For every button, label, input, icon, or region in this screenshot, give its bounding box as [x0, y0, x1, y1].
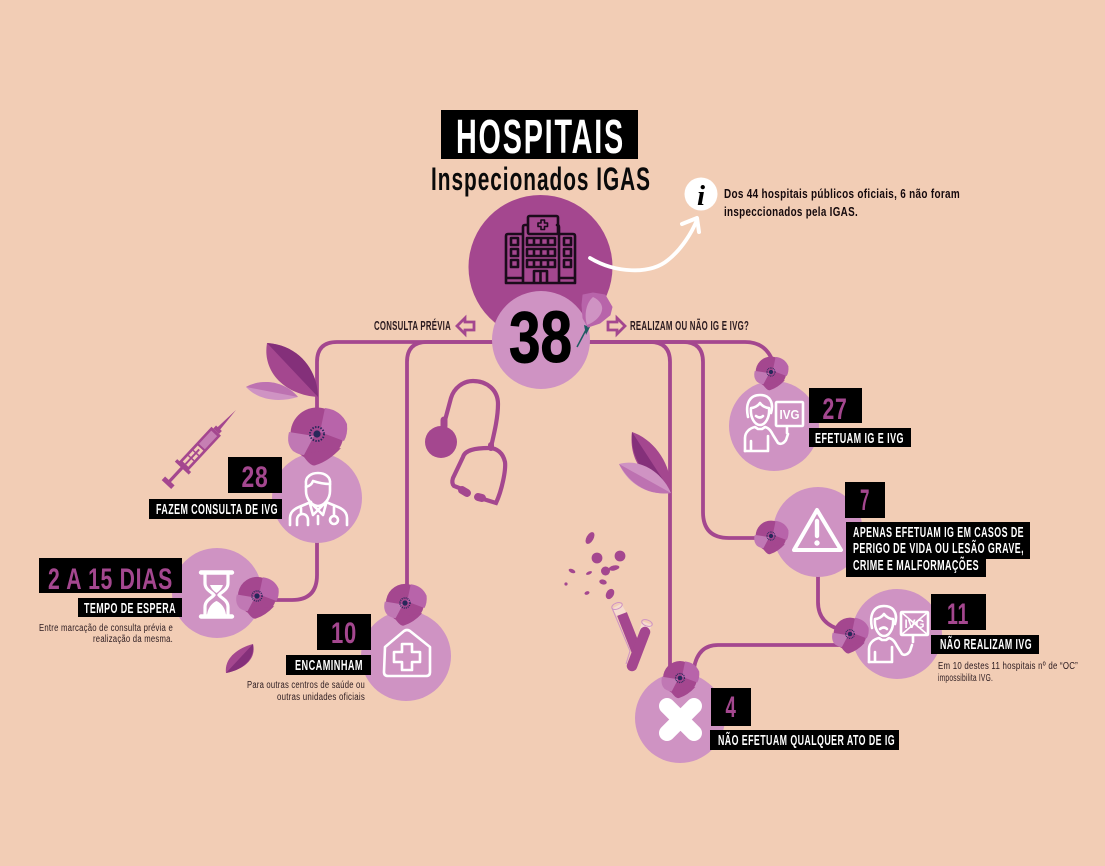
flower: 27: [754, 357, 789, 390]
label: 2 a 15 dias: TEMPO DE ESPERA: [84, 601, 176, 617]
flower: espera: [236, 577, 279, 619]
label: 27: 27: [822, 393, 848, 426]
note: encaminham: outras unidades oficiais: [277, 692, 365, 703]
icon: person with crossed IVG sign: IVG: [904, 617, 924, 631]
info note: [724, 186, 960, 219]
flower: 10: [384, 584, 427, 626]
icon: person with IVG sign: IVG: [780, 407, 800, 422]
flower: 7: [754, 521, 789, 554]
label: 11: NÃO REALIZAM IVG: [940, 635, 1032, 653]
heading: realizam: [608, 318, 749, 334]
icon: clinic house with cross: [384, 630, 430, 676]
panel: 4 não efetuam: [635, 673, 725, 763]
label: 27: [809, 388, 911, 447]
icon: doctor: [290, 473, 347, 525]
label: 4: 4: [726, 691, 736, 724]
note: encaminham: [247, 680, 365, 703]
label: 4: [710, 688, 899, 750]
label: 10: 10: [331, 617, 357, 650]
label: 28: 28: [242, 461, 268, 494]
note: tempo de espera: realização da mesma.: [93, 634, 173, 645]
leaves: center: [619, 432, 671, 493]
icon: test tubes: [611, 601, 653, 666]
label: 11: 11: [947, 598, 969, 631]
note: não realizam: impossibilita IVG.: [938, 673, 993, 684]
panel: total 38: [492, 291, 590, 389]
heading: realizam: REALIZAM OU NÃO IG E IVG?: [630, 318, 749, 333]
panel: 28 consulta: [272, 453, 362, 543]
connector lines: [270, 342, 850, 680]
icon: hourglass: [201, 572, 232, 616]
note: não realizam: [938, 661, 1078, 684]
arrow: to info note: [590, 218, 699, 270]
label: 10: ENCAMINHAM: [295, 658, 363, 674]
icon: hospital building: [506, 216, 575, 283]
title: HOSPITAIS: [441, 110, 638, 164]
flower: 28: [288, 408, 347, 466]
icon: stethoscope: [425, 381, 505, 503]
info note: inspeccionados pela IGAS.: [724, 204, 858, 219]
icon: X: [667, 706, 694, 733]
panel: hospital circle: [468, 195, 612, 339]
label: 28: [149, 457, 282, 519]
label: 4: NÃO EFETUAM QUALQUER ATO DE IG: [718, 731, 895, 749]
info note: Dos 44 hospitais públicos oficiais, 6 não foram: [724, 186, 960, 201]
flower: 4: [662, 661, 699, 698]
heading: consulta prévia: CONSULTA PRÉVIA: [374, 318, 451, 333]
label: 2 a 15 dias: 2 A 15 DIAS: [48, 563, 173, 596]
panel: 11 não realizam: [852, 589, 942, 679]
leaf: lower left: [226, 644, 254, 673]
icon: info: i: [697, 180, 705, 212]
title: HOSPITAIS: HOSPITAIS: [456, 111, 625, 164]
label: 7: [845, 482, 1030, 577]
label: 7: 7: [860, 484, 870, 517]
icon: right arrow: [608, 318, 625, 334]
label: 27: EFETUAM IG E IVG: [815, 431, 904, 447]
leaves: upper left: [246, 343, 318, 400]
label: 11: [931, 594, 1039, 654]
icon: warning: [794, 510, 841, 550]
icon: left arrow: [457, 318, 474, 334]
label: 10: [286, 614, 371, 675]
flower: 11: [832, 618, 869, 654]
panel: total 38: 38: [509, 298, 572, 378]
icon: syringe: [159, 404, 243, 491]
icon: info: [684, 178, 718, 212]
label: 2 a 15 dias: [39, 558, 182, 617]
panel: 27 efetuam: [729, 381, 819, 471]
panel: 10 encaminham: [361, 611, 451, 701]
note: encaminham: Para outras centros de saúde ou: [247, 680, 365, 691]
panel: tempo de espera: [172, 548, 262, 638]
note: tempo de espera: Entre marcação de consulta prévia e: [39, 623, 173, 634]
label: 28: FAZEM CONSULTA DE IVG: [156, 502, 278, 518]
note: tempo de espera: [39, 623, 173, 645]
label: 7: CRIME E MALFORMAÇÕES: [853, 556, 979, 574]
icon: tulip: [577, 293, 612, 347]
icon: spots: [564, 531, 625, 601]
panel: 7 apenas: [773, 487, 863, 577]
subtitle: Inspecionados IGAS: [431, 161, 651, 197]
